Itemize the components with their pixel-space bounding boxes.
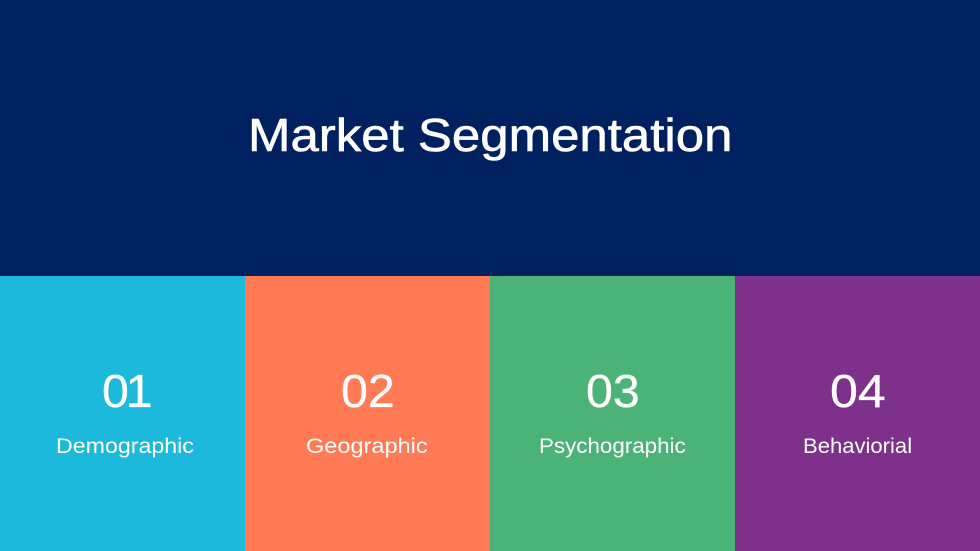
number 04: 04 bbox=[830, 365, 886, 417]
panel: demographic bbox=[0, 276, 245, 551]
panel: geographic bbox=[245, 276, 490, 551]
label geographic: Geographic bbox=[306, 435, 428, 458]
panel: behaviorial bbox=[735, 276, 980, 551]
label behaviorial: Behaviorial bbox=[803, 435, 912, 458]
number 01: 01 bbox=[102, 365, 149, 417]
header band bbox=[0, 0, 980, 276]
title: Market Segmentation bbox=[248, 109, 732, 161]
number 02: 02 bbox=[341, 365, 395, 417]
label psychographic: Psychographic bbox=[539, 435, 686, 458]
panel: psychographic bbox=[490, 276, 735, 551]
number 03: 03 bbox=[586, 365, 640, 417]
label demographic: Demographic bbox=[56, 435, 194, 458]
